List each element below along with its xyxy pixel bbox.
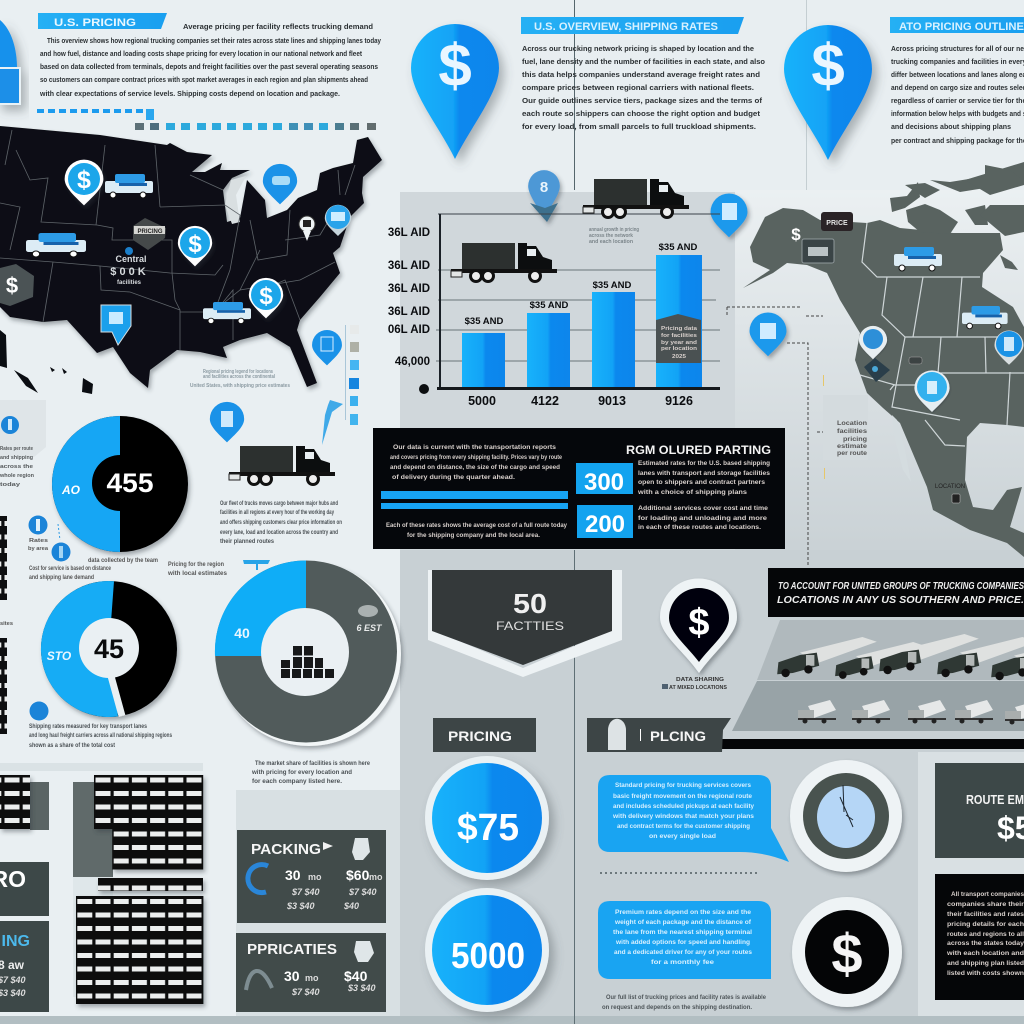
y axis labels: 06L AID [388,324,430,336]
text block: donut 45 caption: and long haul freight carriers across all national shipping regions [29,733,172,739]
speech bubble 2: for a monthly fee [651,959,714,966]
bar value labels: $35 AND [659,242,697,253]
text block: map caption: and facilities across the continental [203,374,276,380]
pin caption: DATA SHARING [676,677,724,683]
pricing label right: PLCING [650,728,706,744]
North America map [743,162,1024,557]
shield: 50 facilities: 50 [513,588,547,619]
map pin: dollar tag: $ [6,273,18,298]
black panel: route text: and shipping plan listed [947,961,1024,967]
heading banner: right [890,17,1024,33]
donut 45 labels [47,634,124,664]
speech bubble 2 [598,901,771,979]
speech bubble 1: on every single load [649,833,716,840]
stat copy: open to shippers and contract partners [638,480,766,486]
truck grid: many trucks [0,775,203,1004]
map center label: Central [115,254,147,264]
pricing card 1: $3 $40 [286,901,315,911]
map note: facilities [837,429,868,435]
icon: truck above chart [583,179,689,218]
chart callout: for facilities [661,333,697,339]
bar value labels: $35 AND [593,280,631,291]
truck icons on map [26,174,251,324]
stat copy: for loading and unloading and more [638,516,768,522]
year labels: 9126 [665,394,693,408]
pricing label left: PRICING [448,728,512,744]
stat box 200: 200 [585,511,625,538]
text block: facilities caption [251,760,370,785]
speech bubble 2: the lane from the nearest shipping terminal [613,929,752,936]
chart callout [656,314,701,363]
right top pin: $ [811,32,845,99]
pricing card 1: $7 $40 [291,887,320,897]
price circle $75 [425,756,549,880]
corner pin fragment [0,20,20,104]
small outline pin [299,216,315,241]
small callouts and notes: with local estimates [167,571,228,577]
text block: right intro [891,44,1024,145]
stat copy: with a choice of shipping plans [637,490,748,496]
map markers: $ [791,225,801,244]
text block: truck caption: Our fleet of trucks moves cargo between major hubs and [220,500,338,507]
black panel: route text: across the states today [947,941,1024,947]
text block: left intro: and how fuel, distance and loading costs shape pricing for every location in our national network and fleet [40,49,362,58]
pricing card 1: $60 [346,867,370,883]
map facility tag [133,218,166,250]
left panel copy: Our data is current with the transportation reports [393,445,557,451]
icon: stacked blocks [281,646,334,678]
pricing card 2: $40 [344,968,368,984]
speech bubble 1 [598,775,789,862]
black location pin [660,578,737,673]
donut 455 labels [61,468,154,498]
small callouts and notes: data collected by the team [88,558,158,564]
side note: circle and text: across the [0,464,33,470]
icon: truck on chart [451,243,557,282]
speech bubble 2: and a dedicated driver for any of your routes [614,949,752,956]
pricing card 1: $40 [343,901,359,911]
map note: estimate [837,444,868,450]
map note: pricing [843,437,867,443]
text block: donut 45 caption: shown as a share of the total cost [29,743,115,749]
map pin: dollar 1 [65,160,103,205]
speech bubble 1: and contract terms for the customer shipping [617,823,750,830]
black location pin: $ [688,602,710,644]
pricing card 2: $7 $40 [291,987,320,997]
pricing card 2: 30 [284,968,300,984]
clock circle [790,760,902,872]
pricing card 1 [237,830,386,923]
stat copy [637,461,771,531]
price circle $75: $75 [457,807,519,849]
pricing card 1: PACKING [251,841,321,858]
left panel copy: and covers pricing from every shipping facility. Prices vary by route [390,455,563,461]
text block: bottom note: Our full list of trucking prices and facility rates is available [606,994,766,1001]
pricing card 1: 30 [285,867,301,883]
heading banner: right: ATO PRICING OUTLINE [899,21,1024,33]
gulf of california [892,415,911,482]
donut chart 45 [41,581,177,717]
bar value labels [465,242,697,327]
text block: left intro: so customers can compare contract prices with spot market averages in each region and plan shipments ahead [40,75,368,84]
dark panel: route cost [935,763,1024,858]
dollar circle: $ [831,922,863,985]
black panel: pricing summary [373,428,785,549]
map pin: dollar 1: $ [77,166,91,194]
side note: circle and text: whole region [0,473,35,479]
left dark panel: pricing [0,921,49,1012]
left dark panel: RO [0,862,49,916]
y axis labels: 36L AID [388,283,430,295]
truck grid backdrop [0,763,203,997]
small pin above chart [528,170,560,222]
year labels: 9013 [598,394,626,408]
speech bubble 2: weight of each package and the distance of [614,919,752,926]
swatch legend [322,325,359,445]
stat copy: lanes with transport and storage facilities [638,471,771,477]
map note: Location [837,421,867,427]
speech bubble 2: Premium rates depend on the size and the [615,909,751,916]
text block: truck caption: facilities in all regions at every hour of the working day [220,509,334,516]
heading banner: left [38,13,167,29]
bar value labels: $35 AND [465,316,503,327]
left panel copy: Each of these rates shows the average cost of a full route today [386,523,568,529]
small callouts and notes: by area [28,546,48,552]
map pin: dollar 3: $ [259,283,273,310]
dashed leader lines [727,307,833,565]
chart note: across the network [589,233,633,239]
y axis labels: 36L AID [388,306,430,318]
lower row trucks [798,700,1024,724]
text block: center intro: each route so shippers can choose the right option and budget [522,109,761,118]
y axis labels: 36L AID [388,260,430,272]
text block: left intro: with clear expectations of service levels. Shipping costs depend on location and package. [39,89,340,98]
icon: truck beside donut [229,446,335,484]
panel stripes [381,491,568,509]
donut chart 455 [52,416,188,552]
donut 45 labels: STO [47,649,72,663]
stat copy: Estimated rates for the U.S. based shipping [638,461,770,467]
text block: truck caption: every lane, load and location across the country and [220,529,338,536]
text block: facilities caption: for each company listed here. [252,778,342,785]
left panel copy: and depend on distance, the size of the cargo and speed [390,465,560,471]
stat box 300 [576,463,633,496]
blue pin over ocean [750,313,786,356]
colored square scale [135,123,376,130]
text block: truck caption [220,500,342,545]
y axis labels [388,227,430,368]
map center label: facilities [117,280,142,286]
y axis labels: 36L AID [388,227,430,239]
map pin: dollar 2 [178,226,212,266]
text block: donut 45 caption: Shipping rates measured for key transport lanes [29,724,148,730]
small pin above chart: 8 [540,179,548,196]
text block: right intro: and decisions about shipping plans [891,122,1011,131]
chart callout: by year and [661,340,697,346]
donut chart facilities: 6 EST [356,623,383,633]
heading banner: left: U.S. PRICING [54,17,136,29]
map note [823,375,868,479]
small callouts and notes [0,516,228,627]
black panel: route text: All transport companies [951,892,1024,898]
panel heading: RGM OLURED PARTING [626,443,771,457]
black panel: route text [935,874,1024,1000]
heading banner: center: U.S. OVERVIEW, SHIPPING RATES [534,21,718,33]
price circle 5000: 5000 [451,935,525,976]
speech bubble 2: with added options for speed and handling [615,939,750,946]
small callouts and notes: Rates [29,538,48,544]
text block: center intro: Our guide outlines service tiers, package sizes and the terms of [522,96,763,105]
text block: left intro: Average pricing per facility reflects trucking demand [183,22,373,31]
bar value labels: $35 AND [530,300,568,311]
donut chart facilities: 40 [234,625,250,641]
chart callout: per location [661,346,697,352]
map pin: dollar tag [0,264,34,306]
chart note [589,227,639,245]
donut 455 labels: AO [61,483,81,497]
black rule [722,739,1024,749]
heading banner: center [521,17,744,34]
text block: center intro: compare prices between regional carriers with national fleets. [522,83,754,92]
pricing card 1: mo [308,872,322,882]
text block: truck caption: their planned routes [220,538,274,545]
text block: map caption: United States, with shipping price estimates [190,383,290,389]
USA map [0,126,382,442]
text block: donut 45 caption [29,702,172,749]
stat copy: in each of these routes and locations. [638,525,761,531]
year labels: 5000 [468,394,496,408]
left panel copy: of delivery during the quarter ahead. [392,475,515,481]
map pin: dollar 2: $ [188,231,202,258]
map center label [110,247,147,286]
donut chart facilities [215,560,401,746]
dotted progress strip [37,109,154,120]
text block: left intro: This overview shows how regional trucking companies set their rates across state lines and shipping lanes today [47,36,382,45]
text block: map caption [190,369,290,389]
pricing label left [433,718,536,752]
left panel copy: for the shipping company and the local area. [407,533,540,539]
small callouts and notes: Pricing for the region [168,562,224,568]
pricing card 2: PPRICATIES [247,941,337,958]
stat box 200 [577,505,633,538]
text block: left intro [39,22,382,98]
map facility tag: PRICING [137,229,163,235]
map markers: LOCATION [935,484,965,490]
chart callout: 2025 [672,354,686,360]
dollar circle [792,897,902,1007]
pricing card 1: $7 $40 [348,887,377,897]
black panel: route text: routes and regions to all [947,932,1024,938]
text block: map caption: Regional pricing legend for locations [203,369,273,375]
black panel: route text: their facilities and rates [947,912,1024,918]
map center label: $ 0 0 K [110,266,146,278]
stripe column left [0,516,7,734]
black banner: fleet headline: LOCATIONS IN ANY US SOUTHERN AND PRICE. [777,594,1024,606]
text block: center intro: Across our trucking network pricing is shaped by location and the [522,44,754,53]
fleet platform [732,620,1024,731]
y axis labels: 46,000 [395,356,430,368]
speech bubble 1: basic freight movement on the regional route [613,793,752,800]
bar chart [388,214,720,408]
blue pin near chart [711,194,747,237]
side note: circle and text: today [0,482,21,488]
text block: left intro: based on data collected from terminals, depots and freight facilities over the past several operating seasons [40,62,378,71]
pricing card 2: $3 $40 [347,983,376,993]
chart callout: Pricing data [661,326,697,332]
side note: circle and text [0,400,46,488]
text block: bottom note: on request and depends on the shipping destination. [602,1004,752,1011]
small callouts and notes: and shipping lane demand [29,575,94,581]
black banner: fleet headline [768,568,1024,617]
text block: center intro: for every load, from small parcels to full truckload shipments. [522,122,756,131]
text block: facilities caption: The market share of facilities is shown here [255,760,370,767]
small callouts and notes: Cost for service is based on distance [29,566,112,572]
left panel copy [386,445,568,539]
text block: center intro [522,44,765,131]
center top pin [411,24,499,159]
upper row trucks [777,634,1024,680]
speech bubble 1: and includes scheduled pickups at each facility [613,803,754,810]
center top pin: $ [438,32,472,99]
chart note: annual growth in pricing [589,227,639,233]
year labels [468,394,693,408]
right top pin [784,25,872,160]
stat box 300: 300 [584,469,624,496]
chart note: and each location [589,239,633,245]
small callouts and notes: sites [0,621,13,627]
map markers: PRICE [826,220,848,227]
black panel: route text: with each location and [946,951,1024,957]
pin caption [662,677,727,691]
black panel: route text: listed with costs shown [947,971,1024,977]
shield: 50 facilities [428,570,622,677]
black panel: route text: pricing details for each [947,922,1024,928]
arctic islands [890,162,1024,270]
pricing card 2: mo [305,973,319,983]
shield: 50 facilities: FACTTIES [496,619,564,633]
map pin: dollar 3 [249,278,283,318]
pricing card 2 [236,933,386,1012]
pin caption: AT MIXED LOCATIONS [669,685,727,691]
speech bubble 1: with delivery windows that match your plans [612,813,754,820]
pricing label right [587,718,731,752]
donut 45 labels: 45 [94,634,124,664]
black panel: route text: companies share their [947,902,1024,908]
pricing card 1: mo [369,872,383,882]
text block: center intro: fuel, lane density and the number of facilities in each state, and also [522,57,765,66]
donut 455 labels: 455 [106,468,154,498]
left dark panel: pricing: ING [2,933,30,950]
text block: bottom note [602,994,766,1011]
speech bubble 1: Standard pricing for trucking services covers [615,782,751,789]
side note: circle and text: Rates per route [0,446,33,452]
stat copy: Additional services cover cost and time [638,506,769,512]
bars [462,255,702,387]
price circle 5000 [425,888,549,1012]
text block: center intro: this data helps companies understand average freight rates and [522,70,760,79]
year labels: 4122 [531,394,559,408]
map note: per route [837,451,868,457]
side note: circle and text: and shipping [0,455,33,461]
text block: truck caption: and offers shipping customers clear price information on [220,519,342,526]
dotted divider [600,872,760,874]
map markers [791,212,1024,503]
text block: facilities caption: with pricing for every location and [251,769,352,776]
map pins: blue markers [101,164,351,442]
